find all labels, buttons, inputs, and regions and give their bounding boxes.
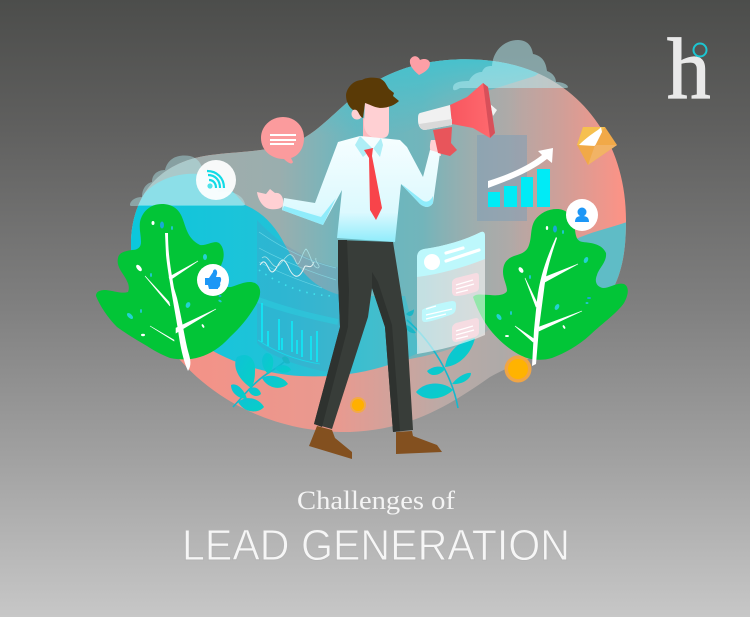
- trousers: [314, 240, 413, 432]
- heading: Challenges of: Challenges of: [297, 486, 455, 515]
- icon: small plant right: [405, 309, 475, 408]
- leaf: right: [473, 209, 628, 366]
- icon: wifi badge: [196, 160, 236, 200]
- shoes: [309, 426, 442, 459]
- left hand: [257, 189, 283, 209]
- man with megaphone: [257, 78, 497, 459]
- icon: heart: [410, 56, 430, 75]
- neck and head: [352, 100, 389, 150]
- icon: small plant left: [231, 353, 291, 411]
- leaf: left: [96, 204, 260, 371]
- icon: large yellow dot: [504, 356, 532, 382]
- icon: right cloud: [453, 40, 568, 90]
- background blob: [120, 50, 640, 440]
- shirt sleeve shading: [282, 184, 433, 225]
- icon: user badge: [566, 199, 598, 231]
- icon: left cloud: [130, 156, 245, 206]
- heading: LEAD GENERATION: LEAD GENERATION: [182, 521, 570, 570]
- logo: h: [667, 20, 710, 117]
- collar: [355, 136, 383, 157]
- icon: envelope: [577, 127, 617, 165]
- card: chat interface panel: [417, 232, 485, 354]
- icon: small yellow dot: [350, 397, 366, 413]
- hair: [346, 78, 399, 118]
- megaphone: [418, 83, 497, 156]
- shirt: [282, 136, 440, 242]
- icon: speech bubble: [261, 117, 304, 163]
- chart panel: curved analytics backdrop: [257, 220, 340, 374]
- icon: thumbs up badge: [197, 264, 229, 296]
- tie: [364, 148, 382, 220]
- chart: rising bars and arrow: [477, 135, 553, 221]
- hand on megaphone: [430, 140, 441, 156]
